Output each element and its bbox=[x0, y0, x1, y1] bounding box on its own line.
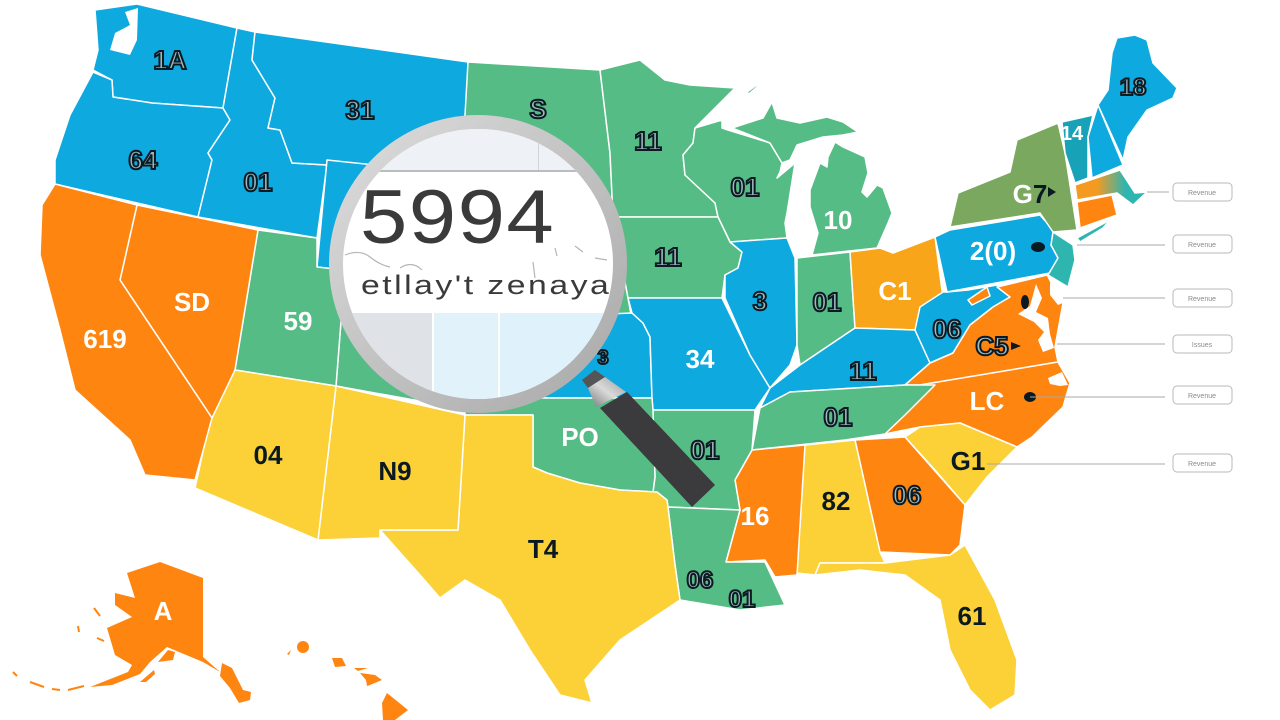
label LA: 06 bbox=[687, 567, 713, 594]
callout 5: Revenue bbox=[1188, 393, 1216, 400]
callout 4: Issues bbox=[1192, 342, 1213, 349]
mark: New York bbox=[1048, 187, 1056, 197]
magnified sketch marks bbox=[345, 246, 607, 278]
state: New Hampshire bbox=[1088, 105, 1123, 178]
state: Wisconsin bbox=[683, 120, 795, 242]
state: Arkansas bbox=[653, 410, 755, 510]
state: Oregon bbox=[55, 72, 230, 217]
state: Minnesota bbox=[600, 60, 735, 217]
label KY: 11 bbox=[849, 356, 877, 386]
Hawaii: Big Island bbox=[382, 693, 408, 720]
label NY: G7 bbox=[1013, 179, 1047, 209]
label NV: SD bbox=[174, 287, 210, 317]
callout 2 bbox=[1077, 235, 1232, 253]
state: Indiana bbox=[797, 252, 855, 365]
label IA: 11 bbox=[654, 242, 682, 272]
lens ring bbox=[329, 115, 627, 413]
callout 3: Revenue bbox=[1188, 296, 1216, 303]
label AR: 01 bbox=[691, 435, 719, 465]
state: Colorado bbox=[336, 270, 470, 410]
label pointer marks bbox=[1011, 187, 1056, 402]
island: Alaska south bbox=[140, 670, 155, 682]
label NC: LC bbox=[970, 386, 1005, 416]
Hawaii: Maui bbox=[360, 673, 382, 686]
label IN: 01 bbox=[813, 287, 841, 317]
label AZ: 04 bbox=[254, 440, 283, 470]
state: Utah bbox=[235, 230, 345, 386]
label SC: G1 bbox=[951, 446, 985, 476]
state: Kansas bbox=[465, 313, 652, 398]
state: Idaho bbox=[198, 28, 327, 238]
Hawaii: Kauai bbox=[297, 641, 309, 653]
label OH: C1 bbox=[878, 276, 912, 306]
label ME: 18 bbox=[1120, 74, 1146, 101]
label TX: T4 bbox=[528, 534, 559, 564]
state: Massachusetts bbox=[1075, 170, 1147, 205]
label AK: A bbox=[154, 596, 173, 626]
state: Ohio bbox=[850, 237, 943, 330]
callout 3 bbox=[1063, 289, 1232, 307]
label CA: 619 bbox=[83, 324, 127, 354]
mark: Maryland bbox=[1021, 295, 1029, 309]
mark: Virginia bbox=[1011, 342, 1021, 350]
state: Maine bbox=[1098, 35, 1177, 160]
state: Arizona bbox=[195, 370, 336, 540]
lens content bbox=[343, 129, 613, 399]
magnified number: 5994 bbox=[360, 175, 555, 260]
label MS: 16 bbox=[741, 501, 769, 531]
callouts on east coast bbox=[987, 183, 1232, 472]
Alaska panhandle bbox=[220, 663, 251, 703]
state: Pennsylvania bbox=[935, 215, 1058, 292]
label VA: C5 bbox=[975, 331, 1009, 361]
state: New Mexico bbox=[318, 386, 465, 540]
mark: Pennsylvania bbox=[1031, 242, 1045, 252]
label AL: 82 bbox=[822, 486, 850, 516]
label NM: N9 bbox=[378, 456, 412, 486]
callout 4 bbox=[1057, 335, 1232, 353]
state: North Carolina bbox=[885, 362, 1070, 447]
callout 6: Revenue bbox=[1188, 461, 1216, 468]
water cut-outs: Puget Sound and Chesapeake Bay bbox=[110, 8, 1068, 386]
label MI: 10 bbox=[824, 205, 852, 235]
Aleutian islands bbox=[13, 608, 104, 690]
state: West Virginia bbox=[915, 285, 1010, 363]
Chesapeake Bay bbox=[1018, 284, 1054, 352]
Hawaii: Molokai bbox=[354, 668, 368, 671]
Puget Sound bbox=[110, 8, 138, 55]
Hawaii: Niihau bbox=[287, 650, 291, 655]
Kodiak island bbox=[158, 650, 175, 662]
state: Texas bbox=[380, 415, 680, 703]
state value labels bbox=[83, 45, 1146, 631]
label OK: PO bbox=[561, 422, 599, 452]
label VT: 14 bbox=[1061, 123, 1084, 145]
state: Louisiana bbox=[668, 507, 785, 610]
label ID: 01 bbox=[244, 167, 272, 197]
state: Upper Michigan bbox=[732, 102, 858, 163]
state: Iowa bbox=[613, 217, 742, 298]
label WI: 01 bbox=[731, 172, 759, 202]
callout 1: Revenue bbox=[1188, 190, 1216, 197]
state: Kentucky bbox=[760, 328, 930, 408]
state: Oklahoma bbox=[465, 398, 655, 492]
state: California bbox=[40, 184, 212, 480]
state: New Jersey bbox=[1048, 232, 1075, 287]
state: Virginia and Maryland bbox=[905, 275, 1063, 385]
state: Georgia bbox=[855, 437, 965, 555]
label GA: 06 bbox=[893, 480, 921, 510]
label MT: 31 bbox=[346, 95, 374, 125]
state: South Carolina bbox=[905, 423, 1017, 505]
label MO: 34 bbox=[686, 344, 715, 374]
label UT: 59 bbox=[284, 306, 312, 336]
state: Long Island bbox=[1077, 220, 1110, 242]
state: Alabama bbox=[797, 440, 885, 575]
label WA: 1A bbox=[153, 45, 187, 75]
magnifier handle bbox=[600, 392, 715, 507]
state: Maryland panhandle bbox=[968, 287, 990, 305]
state: Alaska and Hawaii insets bbox=[13, 562, 408, 720]
Delaware Bay bbox=[1050, 282, 1063, 305]
state: Lower Michigan bbox=[810, 142, 892, 255]
magnified caption: etllay't zenaya bbox=[361, 270, 611, 300]
state: Mississippi bbox=[726, 445, 805, 577]
mark: North Carolina bbox=[1024, 392, 1036, 402]
magnifier neck bbox=[582, 370, 605, 388]
label WV: 06 bbox=[933, 314, 961, 344]
state: Alaska bbox=[90, 562, 220, 687]
state: Nevada bbox=[120, 205, 258, 418]
state: Vermont bbox=[1062, 115, 1093, 183]
label IL: 3 bbox=[753, 286, 767, 316]
state: Wyoming bbox=[317, 160, 470, 285]
label LA east: 01 bbox=[729, 586, 755, 613]
state: Illinois bbox=[725, 238, 797, 388]
label KS: 3 bbox=[597, 347, 609, 369]
label ND: S bbox=[529, 94, 547, 124]
callout 2: Revenue bbox=[1188, 242, 1216, 249]
label TN: 01 bbox=[824, 402, 852, 432]
state: Washington bbox=[93, 4, 237, 108]
label PA: 2(0) bbox=[970, 236, 1016, 266]
state: Montana bbox=[252, 32, 468, 175]
Pamlico Sound bbox=[1048, 372, 1068, 386]
state: Isle Royale bbox=[747, 84, 758, 94]
state: North and South Dakota, Nebraska bbox=[465, 62, 632, 320]
callout 1 bbox=[1147, 183, 1232, 201]
Hawaii: Oahu bbox=[332, 658, 346, 667]
state: Missouri bbox=[628, 298, 770, 410]
label OR: 64 bbox=[129, 145, 158, 175]
label MN: 11 bbox=[634, 126, 662, 156]
state: New York bbox=[950, 123, 1077, 232]
magnifying glass bbox=[329, 115, 715, 507]
magnifier collar bbox=[588, 377, 626, 407]
state: Tennessee bbox=[752, 385, 935, 450]
label FL: 61 bbox=[958, 601, 986, 631]
state: Florida bbox=[815, 545, 1017, 710]
state: Connecticut and Rhode Island bbox=[1077, 195, 1117, 228]
callout 6 bbox=[987, 454, 1232, 472]
callout 5 bbox=[1030, 386, 1232, 404]
